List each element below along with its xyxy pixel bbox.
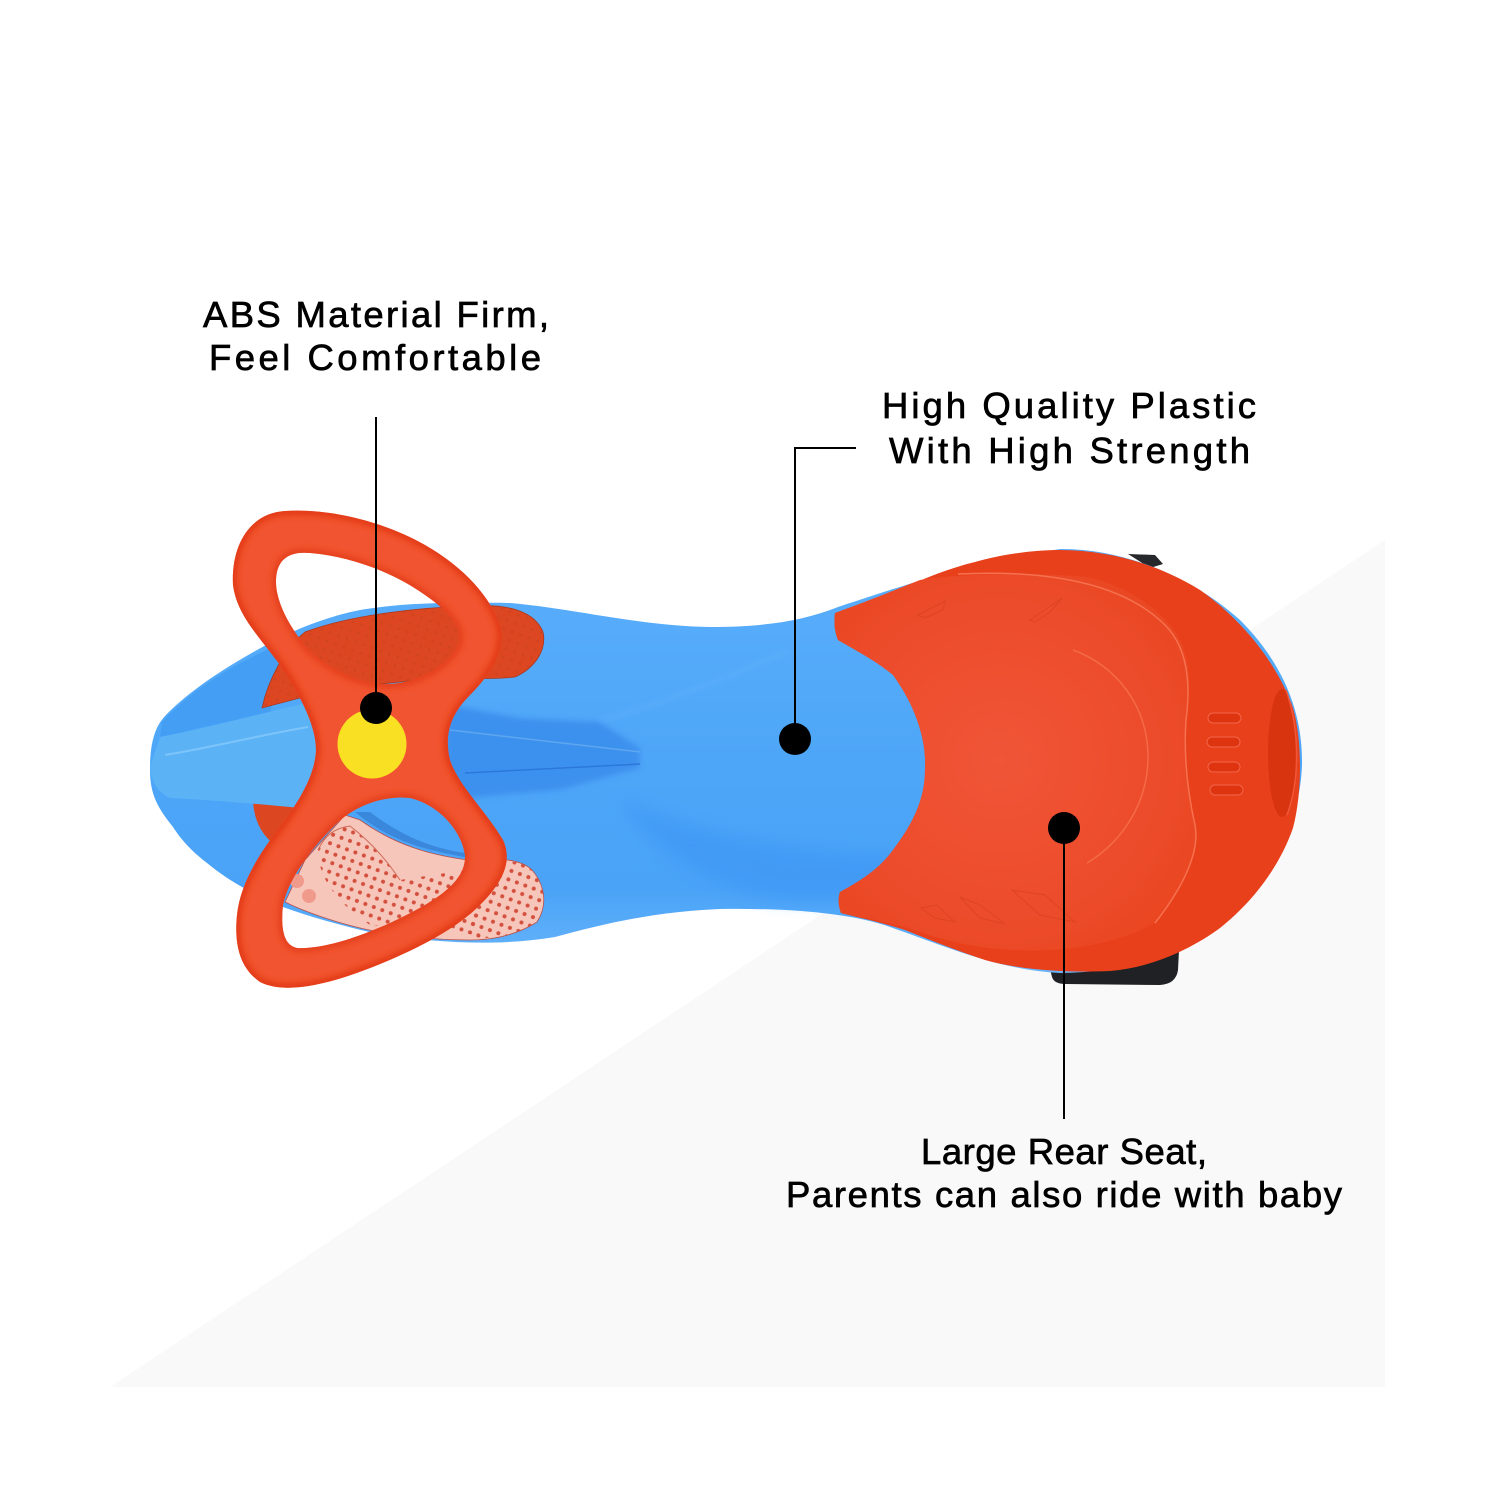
leaf marks [918, 598, 1075, 924]
callout text: High Quality Plastic [882, 385, 1256, 426]
seat moulded arc [1073, 650, 1148, 863]
elbow leader line [795, 448, 856, 739]
footpad: bottom, pink textured [285, 812, 544, 940]
callout text [786, 1131, 1343, 1215]
footpad: top, dark red [262, 606, 544, 708]
product: ride-on car top view [150, 511, 1302, 988]
rear wheels [1049, 554, 1179, 985]
callout: large rear seat [786, 812, 1343, 1215]
light centre band on nose [150, 703, 320, 808]
rear vents [1207, 713, 1243, 795]
callout text [203, 294, 549, 378]
background light grey triangle [110, 540, 1385, 1387]
red rear seat [834, 550, 1300, 972]
callout text: Large Rear Seat, [921, 1131, 1207, 1172]
rear handle slot [1268, 689, 1296, 817]
callout: ABS material [203, 294, 549, 724]
marker dot [1048, 812, 1080, 844]
body shading [160, 640, 920, 900]
callout text: ABS Material Firm, [203, 294, 549, 335]
callout text: Parents can also ride with baby [786, 1174, 1343, 1215]
blue car body [150, 549, 1302, 973]
yellow horn button [338, 710, 406, 778]
red steering handle [233, 511, 507, 988]
seat raised area [834, 574, 1196, 950]
marker dot [779, 723, 811, 755]
footpad: lower left dark red [253, 802, 300, 845]
callout text: Feel Comfortable [209, 337, 541, 378]
callout: high quality plastic [779, 385, 1256, 755]
callout text: With High Strength [889, 430, 1250, 471]
leader line [375, 417, 377, 708]
leader line [1063, 828, 1065, 1119]
callout text [882, 385, 1256, 471]
marker dot [360, 692, 392, 724]
